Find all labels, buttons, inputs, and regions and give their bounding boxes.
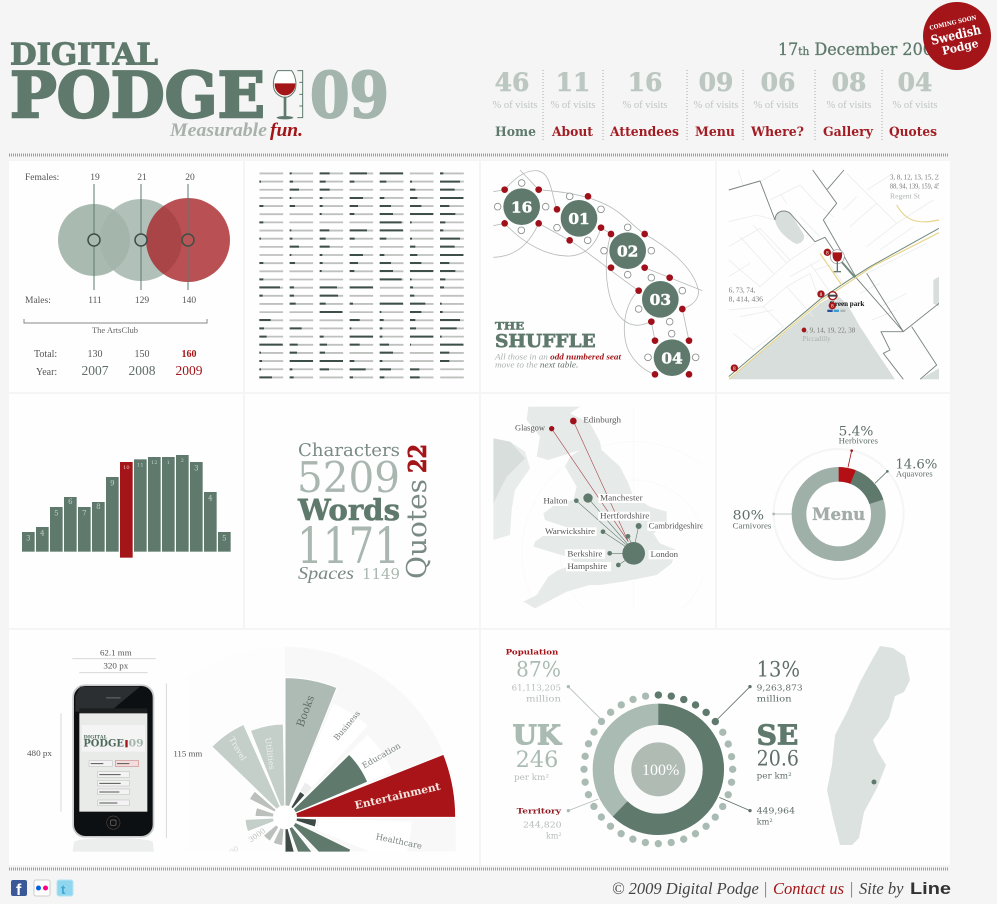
panel: text statistics: Quotes — [402, 479, 433, 579]
panel: location map: Regent St — [890, 192, 920, 201]
panel: iphone dimensions: 480 px — [27, 749, 53, 758]
UK figures: 87% — [516, 658, 561, 683]
panel: bar chart by hour — [22, 455, 231, 558]
panel: location map: 8 — [820, 292, 823, 298]
panel: menu donut chart: Herbivores — [839, 436, 878, 445]
Sweden figures: 9,263,873 — [757, 684, 803, 693]
panel: rose chart — [212, 678, 456, 852]
panel: text statistics: Spaces — [298, 563, 354, 583]
panel: the shuffle seating diagram: 04 — [661, 349, 683, 367]
panel: attendance venn diagram — [24, 173, 230, 378]
icon: flickr — [34, 880, 50, 896]
UK figures: 61,113,205 — [512, 684, 561, 693]
badge: coming soon Swedish Podge: Swedish — [930, 23, 983, 49]
panel: menu donut chart — [733, 424, 937, 579]
UK figures: UK — [513, 720, 562, 752]
panel: rose chart: Education — [360, 740, 403, 770]
Sweden figures: km² — [757, 817, 773, 826]
Sweden figures: SE — [757, 720, 798, 752]
panel: the shuffle seating diagram: move to the next table. — [495, 360, 578, 369]
education wedge — [294, 755, 367, 812]
logo: Digital Podge 09 — [10, 38, 389, 141]
navigation with visit percentages: 04 — [898, 68, 932, 97]
panel: attendance venn diagram: 140 — [182, 296, 196, 306]
panel: bar chart by hour: 5 — [54, 510, 59, 518]
navigation with visit percentages: Home — [495, 125, 536, 140]
panel: bar chart by hour: 4 — [40, 529, 45, 537]
panel: location map: Piccadilly — [803, 334, 831, 343]
donut share — [603, 714, 713, 824]
navigation with visit percentages: Menu — [695, 125, 735, 140]
logo: Digital Podge 09: 09 — [310, 58, 389, 132]
panel: attendance venn diagram: 2009 — [176, 363, 203, 378]
panel: location map: 8 — [826, 250, 829, 256]
panel: rose chart: 3000 — [247, 826, 267, 844]
navigation with visit percentages: % of visits — [754, 100, 798, 111]
UK figures: Population — [506, 647, 559, 656]
navigation with visit percentages: % of visits — [893, 100, 937, 111]
tagline: Measurable — [169, 120, 268, 141]
panel: the shuffle seating diagram: THE — [495, 322, 525, 333]
panel: rose chart: 2000 — [220, 844, 241, 862]
books wedge — [285, 678, 337, 817]
navigation with visit percentages: Where? — [750, 125, 804, 140]
panel: rose chart: Healthcare — [375, 831, 423, 851]
footer credits — [612, 879, 951, 898]
panel: text statistics: Characters — [298, 440, 400, 461]
panel: bar chart by hour: 10 — [123, 465, 130, 471]
Sweden figures: per km² — [757, 771, 792, 780]
panel: attendee origin map: Warwickshire — [545, 527, 595, 536]
panel: location map: 8 — [831, 304, 834, 310]
panel: attendee origin map: Cambridgeshire — [649, 521, 704, 530]
panel: attendee origin map: Hertfordshire — [600, 512, 650, 521]
UK figures: 246 — [516, 747, 558, 773]
navigation with visit percentages: Attendees — [609, 125, 679, 140]
panel: bar chart by hour: 4 — [208, 494, 213, 502]
panel: location map: 8, 9, 14, 19, 22, 38 — [803, 325, 856, 334]
panel: rose chart: Business — [332, 709, 362, 742]
panel: attendee origin map: London — [651, 550, 679, 559]
icon: twitter: t — [61, 882, 66, 897]
panel: bar matrix — [259, 172, 463, 379]
entertainment wedge — [285, 754, 456, 817]
panel: bar chart by hour: 12 — [151, 460, 158, 466]
panel: the shuffle seating diagram: 02 — [617, 242, 638, 260]
panel: UK versus Sweden comparison — [506, 647, 803, 844]
travel wedge — [212, 725, 280, 808]
panel: attendance venn diagram: 129 — [135, 296, 149, 306]
Great Britain — [523, 407, 677, 608]
panel: location map: Green park — [829, 299, 865, 308]
badge: coming soon Swedish Podge — [923, 2, 991, 70]
panel: attendance venn diagram: 19 — [90, 173, 100, 183]
navigation with visit percentages: % of visits — [493, 100, 537, 111]
panel: menu donut chart: 5.4% — [839, 424, 873, 439]
panel: attendee origin map: Halton — [543, 497, 569, 506]
navigation with visit percentages: % of visits — [694, 100, 738, 111]
panel: rose chart: Utilities — [263, 737, 277, 770]
panel: the shuffle seating diagram: SHUFFLE — [495, 332, 596, 352]
panel: bar chart by hour: 5 — [222, 535, 227, 543]
navigation with visit percentages: 09 — [699, 68, 733, 97]
icon: facebook: f — [16, 882, 22, 899]
navigation with visit percentages: 11 — [556, 68, 590, 97]
icon: tube roundel — [828, 292, 838, 300]
panel: attendance venn diagram: 130 — [88, 349, 102, 360]
panel: bar chart by hour: 7 — [82, 509, 87, 517]
social icons — [11, 880, 73, 899]
panel: the shuffle seating diagram: 16 — [511, 198, 532, 216]
UK figures: 244,820 — [523, 820, 562, 829]
panel: attendee origin map: Berkshire — [567, 549, 603, 558]
panel: location map: 8 — [733, 366, 736, 372]
panel: location map: 3, 8, 12, 13, 15, 23, — [890, 172, 943, 181]
panel: iphone dimensions — [27, 649, 203, 852]
panel: attendance venn diagram: Males: — [25, 296, 51, 306]
UK figures — [506, 647, 562, 840]
badge: coming soon Swedish Podge: COMING SOON — [929, 14, 978, 32]
panel: rose chart: Entertainment — [353, 780, 442, 812]
panel: text statistics: Words — [297, 493, 400, 527]
panel: rose chart: Books — [294, 694, 317, 729]
navigation with visit percentages: 06 — [761, 68, 795, 97]
Sweden figures: 449,964 — [757, 806, 795, 815]
footer credits: Contact us — [773, 879, 844, 898]
panel: location map: 88, 94, 139, 159, 453 — [890, 181, 944, 190]
footer credits: © 2009 Digital Podge — [612, 879, 759, 898]
panel: text statistics: 1149 — [362, 565, 400, 583]
panel: attendee origin map: Hampshire — [567, 562, 608, 571]
Sweden figures: 13% — [757, 658, 800, 683]
panel: menu donut chart: Aquavores — [896, 470, 933, 479]
donut share: 100% — [642, 762, 679, 779]
navigation with visit percentages: 08 — [832, 68, 866, 97]
panel: attendee origin map — [494, 406, 703, 608]
panel: menu donut chart: Carnivores — [733, 521, 771, 530]
panel: bar chart by hour: 8 — [96, 503, 101, 511]
panel: text statistics: 5209 — [297, 453, 400, 502]
UK figures: per km² — [514, 773, 549, 782]
panel: the shuffle seating diagram: 03 — [650, 291, 671, 309]
navigation with visit percentages: Quotes — [889, 125, 937, 140]
navigation with visit percentages: 16 — [628, 68, 662, 97]
tagline — [169, 120, 303, 141]
panel: attendance venn diagram: 21 — [137, 173, 147, 183]
navigation with visit percentages — [493, 68, 937, 141]
Sweden figures: 20.6 — [757, 747, 799, 772]
icon: wine glass — [273, 71, 303, 119]
panel: attendance venn diagram: Females: — [25, 173, 59, 183]
panel: location map: 8, 414, 436 — [729, 295, 763, 304]
panel: attendance venn diagram: The ArtsClub — [92, 325, 138, 335]
panel: text statistics: 22 — [403, 444, 432, 473]
navigation with visit percentages: % of visits — [827, 100, 871, 111]
panel: rose chart: Travel — [227, 735, 248, 763]
footer credits: Line — [910, 879, 951, 898]
panel: text statistics: 1171 — [297, 517, 400, 575]
event date: 17th December 2009 — [778, 40, 943, 59]
navigation with visit percentages: About — [551, 125, 593, 140]
iphone: PODGE — [83, 738, 124, 749]
panel: iphone dimensions: 62.1 mm — [100, 649, 132, 658]
UK figures: Territory — [517, 806, 562, 815]
icon: venue wine glass — [830, 250, 844, 272]
navigation with visit percentages: Gallery — [823, 125, 873, 140]
panel: attendance venn diagram: Year: — [36, 367, 57, 378]
panel: attendance venn diagram: 111 — [88, 296, 102, 306]
panel: menu donut chart: 80% — [733, 509, 764, 524]
utilities wedge — [251, 724, 284, 806]
navigation with visit percentages: % of visits — [623, 100, 667, 111]
logo: Digital Podge 09: PODGE — [10, 58, 265, 132]
panel: menu donut chart: 14.6% — [895, 458, 937, 473]
panel: bar chart by hour: 1 — [167, 460, 170, 466]
panel: attendee origin map: Edinburgh — [583, 416, 622, 425]
panel: the shuffle seating diagram — [493, 170, 702, 378]
panel: iphone dimensions: 115 mm — [173, 750, 203, 759]
footer credits: | — [850, 879, 853, 898]
panel: attendance venn diagram: 2008 — [128, 363, 156, 378]
panel: bar chart by hour: 9 — [110, 479, 115, 487]
panel: bar chart by hour: 2 — [181, 458, 184, 464]
panel: location map — [729, 170, 944, 379]
footer credits: Site by — [859, 879, 904, 898]
panel: bar chart by hour: 3 — [26, 534, 31, 542]
panel: bar chart by hour: 11 — [137, 463, 144, 469]
iphone: DIGITAL — [84, 735, 107, 740]
Ireland — [493, 438, 530, 540]
logo: Digital Podge 09: DIGITAL — [10, 38, 158, 72]
panel: menu donut chart: Menu — [812, 504, 865, 524]
panel: text statistics — [297, 440, 433, 583]
Sweden figures: million — [757, 695, 792, 704]
footer credits: | — [764, 879, 767, 898]
UK figures: km² — [546, 831, 562, 840]
panel: attendance venn diagram: Total: — [34, 349, 57, 360]
panel: attendee origin map: Glasgow — [515, 423, 545, 432]
iphone: 09 — [129, 738, 144, 749]
panel: bar chart by hour: 6 — [68, 498, 73, 506]
panel: location map: 6, 73, 74, — [729, 286, 755, 295]
Sweden figures — [757, 658, 803, 826]
UK figures: million — [526, 695, 561, 704]
panel: attendance venn diagram: 20 — [185, 173, 195, 183]
iphone — [72, 684, 154, 852]
panel: the shuffle seating diagram: All those in an odd numbered seat — [494, 352, 622, 361]
navigation with visit percentages: 46 — [495, 68, 529, 97]
panel: attendee origin map: Manchester — [600, 493, 643, 502]
panel: attendance venn diagram: 150 — [134, 349, 150, 360]
tagline: fun. — [270, 120, 303, 141]
panel: iphone dimensions: 320 px — [103, 662, 129, 671]
badge: coming soon Swedish Podge: Podge — [941, 36, 980, 58]
map: Sweden — [827, 646, 910, 845]
navigation with visit percentages: % of visits — [551, 100, 595, 111]
panel: bar chart by hour: 3 — [194, 464, 199, 472]
panel: attendance venn diagram: 2007 — [82, 363, 109, 378]
panel: the shuffle seating diagram: 01 — [568, 210, 590, 228]
panel: attendance venn diagram: 160 — [182, 349, 196, 360]
